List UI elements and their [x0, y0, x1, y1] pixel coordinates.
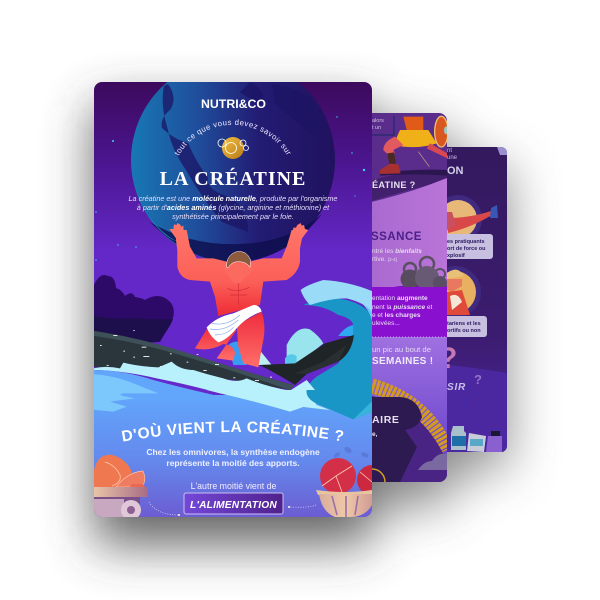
continents — [162, 82, 280, 232]
section body: Chez les omnivores, la synthèse endogène — [146, 447, 320, 457]
hero: Atlas — [169, 223, 308, 367]
top text: alors — [372, 118, 384, 124]
magenta section — [372, 287, 447, 337]
intro paragraph: La créatine est une molécule naturelle, produite par l'organisme — [129, 194, 337, 203]
wave crest — [301, 280, 373, 313]
magenta text — [372, 295, 433, 327]
foam and water — [90, 362, 323, 412]
icon: creatine molecule — [218, 137, 248, 159]
dotted divider — [372, 336, 445, 338]
fish silhouettes — [333, 446, 370, 459]
subheading: L'autre moitié vient de — [191, 481, 276, 491]
callout: pratiquants — [447, 234, 493, 259]
intro paragraph: synthétisée principalement par le foie. — [172, 212, 294, 221]
top text: nt — [447, 148, 452, 154]
waves — [228, 280, 373, 400]
callout: pratiquants: ort de force ou — [447, 246, 486, 252]
dark bottom panel — [372, 396, 447, 482]
warrior illustration — [370, 116, 448, 202]
dotted arrows — [149, 502, 316, 515]
section body: représente la moitié des apports. — [166, 458, 300, 468]
big wave body — [303, 298, 373, 400]
section text: ntré les bienfaits — [372, 248, 422, 255]
peak text: un pic au bout de — [372, 345, 431, 354]
supplement bottles — [451, 426, 502, 452]
cloud — [418, 454, 447, 470]
intro paragraph: à partir d'acides aminés (glycine, arginine et méthionine) et — [137, 203, 330, 212]
section text — [372, 248, 422, 262]
back card: ? — [474, 372, 482, 387]
bottom panel heading: AIRE — [372, 414, 400, 426]
curved subtitle: tout ce que vous devez savoir sur — [174, 119, 291, 156]
section body — [146, 447, 320, 468]
left leg — [195, 327, 237, 361]
middle card: SEMAINES ! — [372, 356, 433, 367]
intro paragraph — [129, 194, 337, 221]
hair — [227, 251, 251, 267]
heading band: ÉATINE ? — [372, 179, 416, 190]
button: L'ALIMENTATION — [184, 493, 283, 514]
ring — [372, 468, 386, 482]
muscles — [227, 283, 249, 305]
corner decoration — [497, 147, 507, 155]
callout: pratiquants: es pratiquants — [447, 239, 485, 245]
middle card — [372, 113, 447, 482]
loincloth — [207, 305, 262, 342]
small waves — [287, 329, 323, 365]
meat in bowl — [316, 458, 387, 517]
rock — [90, 330, 354, 390]
section heading: D'OÙ VIENT LA CRÉATINE ? — [122, 420, 344, 442]
title: LA CRÉATINE — [160, 167, 306, 190]
section text: rtive. [2-4] — [372, 256, 397, 263]
callout: végétariens — [447, 316, 487, 337]
violet section — [372, 337, 447, 482]
button: L'ALIMENTATION: L'ALIMENTATION — [190, 500, 277, 511]
athlete illustration — [447, 195, 498, 234]
right leg — [237, 312, 264, 367]
back card heading: ON — [447, 165, 464, 177]
meat on pedestal — [94, 455, 148, 520]
magenta text: entation augmente — [372, 295, 428, 302]
section heading: SSANCE — [371, 231, 422, 243]
logo: NUTRI&CO — [201, 97, 266, 111]
question marks: ? — [439, 342, 457, 375]
magenta text: ulevées... — [372, 320, 400, 327]
main card — [94, 82, 372, 517]
callout: végétariens: ortifs ou non — [447, 328, 481, 334]
callout: végétariens: tariens et les — [447, 321, 481, 327]
back card: ? — [461, 397, 468, 409]
magenta text: e et les charges — [372, 312, 421, 319]
middle card: e, — [372, 431, 378, 438]
golden arch — [372, 386, 447, 450]
window frame — [372, 116, 394, 135]
drop shadow behind cards — [94, 105, 509, 545]
back card — [447, 147, 507, 452]
lower blue section — [94, 395, 372, 517]
middle card: t un — [372, 125, 381, 131]
lilac section — [372, 178, 447, 287]
back card: une — [447, 155, 458, 161]
kettlebells — [394, 256, 447, 287]
globe — [131, 82, 335, 262]
magenta text: nent la puissance et — [372, 304, 433, 311]
hands — [169, 223, 308, 248]
back card label: SIR — [447, 382, 466, 393]
callout: pratiquants: xplosif — [447, 253, 465, 259]
head — [224, 262, 253, 283]
stars — [95, 116, 365, 261]
lower violet section — [447, 365, 507, 452]
vegetarian illustration — [447, 266, 481, 316]
dark cloud — [94, 275, 174, 345]
torso and arms — [176, 230, 302, 316]
